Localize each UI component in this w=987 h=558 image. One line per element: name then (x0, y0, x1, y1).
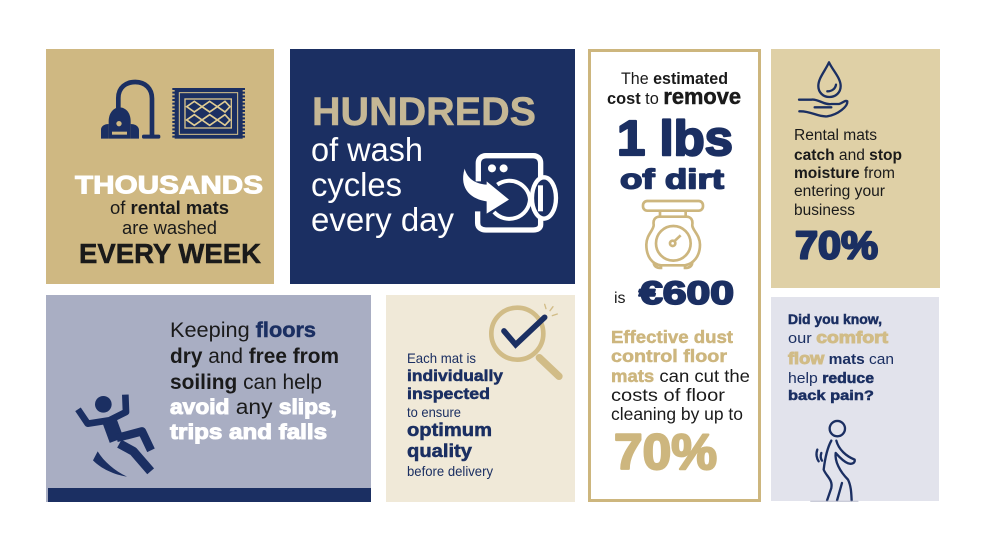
text: is: is (614, 290, 626, 307)
text: the estimated: The estimated (621, 70, 728, 88)
icon: weighing scale (643, 201, 703, 268)
text: did you know: help reduce (788, 371, 874, 387)
text: did you know: back pain? (788, 387, 874, 403)
heading: hundreds: HUNDREDS (312, 90, 536, 134)
icon: vacuum cleaner (101, 82, 160, 139)
text: effective dust control (611, 327, 750, 424)
text: each mat inspected: optimum (407, 420, 492, 440)
text: are washed: are washed (122, 218, 217, 238)
icon: washing machine (463, 156, 556, 230)
text: each mat inspected (407, 350, 503, 479)
icon: person slipping (78, 395, 151, 477)
text: of wash cycles every day: cycles (311, 166, 402, 203)
stat: of dirt: of dirt (620, 164, 724, 194)
icon: walking person (811, 421, 858, 501)
text: each mat inspected: before delivery (407, 463, 493, 479)
panel: moisture (771, 49, 940, 288)
panel: thousands of rental mats (46, 49, 274, 284)
text: each mat inspected: to ensure (407, 404, 461, 420)
text: of wash cycles every day: of wash (311, 131, 423, 168)
stat: 600 euros: €600 (639, 275, 734, 311)
text: keeping floors dry: avoid any slips, (170, 396, 337, 419)
text: keeping floors dry (170, 319, 339, 444)
icon: magnifier with check (491, 304, 559, 376)
text: each mat inspected: Each mat is (407, 350, 476, 366)
text: did you know (788, 311, 894, 403)
panel: hundreds of wash cycles (290, 49, 575, 284)
text: rental mats catch moisture: business (794, 202, 855, 219)
stat: 70 percent moisture: 70% (795, 224, 878, 268)
text: did you know: our comfort (788, 328, 888, 347)
text: effective dust control: cleaning by up to (611, 404, 743, 424)
text: rental mats catch moisture (794, 127, 902, 219)
text: of wash cycles every day: every day (311, 201, 454, 238)
text: every week: EVERY WEEK (79, 238, 261, 269)
text: cost to remove: cost to remove (607, 84, 741, 109)
text: each mat inspected: inspected (407, 386, 490, 403)
text: rental mats catch moisture: catch and stop (794, 147, 902, 164)
text: of wash cycles every day (311, 131, 454, 238)
panel: cost to remove dirt (590, 50, 760, 500)
text: each mat inspected: individually (407, 368, 503, 385)
text: effective dust control: costs of floor (611, 385, 725, 405)
text: of rental mats: of rental mats (110, 198, 229, 218)
text: keeping floors dry: soiling can help (170, 371, 322, 394)
stat: 1 lbs: 1 lbs (617, 112, 733, 166)
text: rental mats catch moisture: Rental mats (794, 127, 877, 144)
text: rental mats catch moisture: moisture from (794, 165, 895, 182)
text: effective dust control: mats can cut the (611, 366, 750, 386)
panel: slips trips and falls (46, 295, 371, 502)
panel: comfort flow mats (771, 297, 939, 501)
text: did you know: flow mats can (788, 349, 894, 368)
text: keeping floors dry: trips and falls (170, 421, 327, 444)
icon: patterned mat (174, 88, 244, 139)
icon: water drop on hand (799, 62, 847, 116)
text: did you know: Did you know, (788, 311, 882, 327)
heading: thousands: THOUSANDS (75, 172, 263, 200)
text: effective dust control: control floor (611, 346, 727, 366)
text: keeping floors dry: dry and free from (170, 345, 339, 368)
text: effective dust control: Effective dust (611, 327, 733, 347)
text: rental mats catch moisture: entering your (794, 183, 885, 200)
stat: 70 percent: 70% (614, 424, 717, 480)
text: keeping floors dry: Keeping floors (170, 319, 316, 342)
panel: inspected mats (386, 295, 575, 502)
text: each mat inspected: quality (407, 441, 472, 461)
